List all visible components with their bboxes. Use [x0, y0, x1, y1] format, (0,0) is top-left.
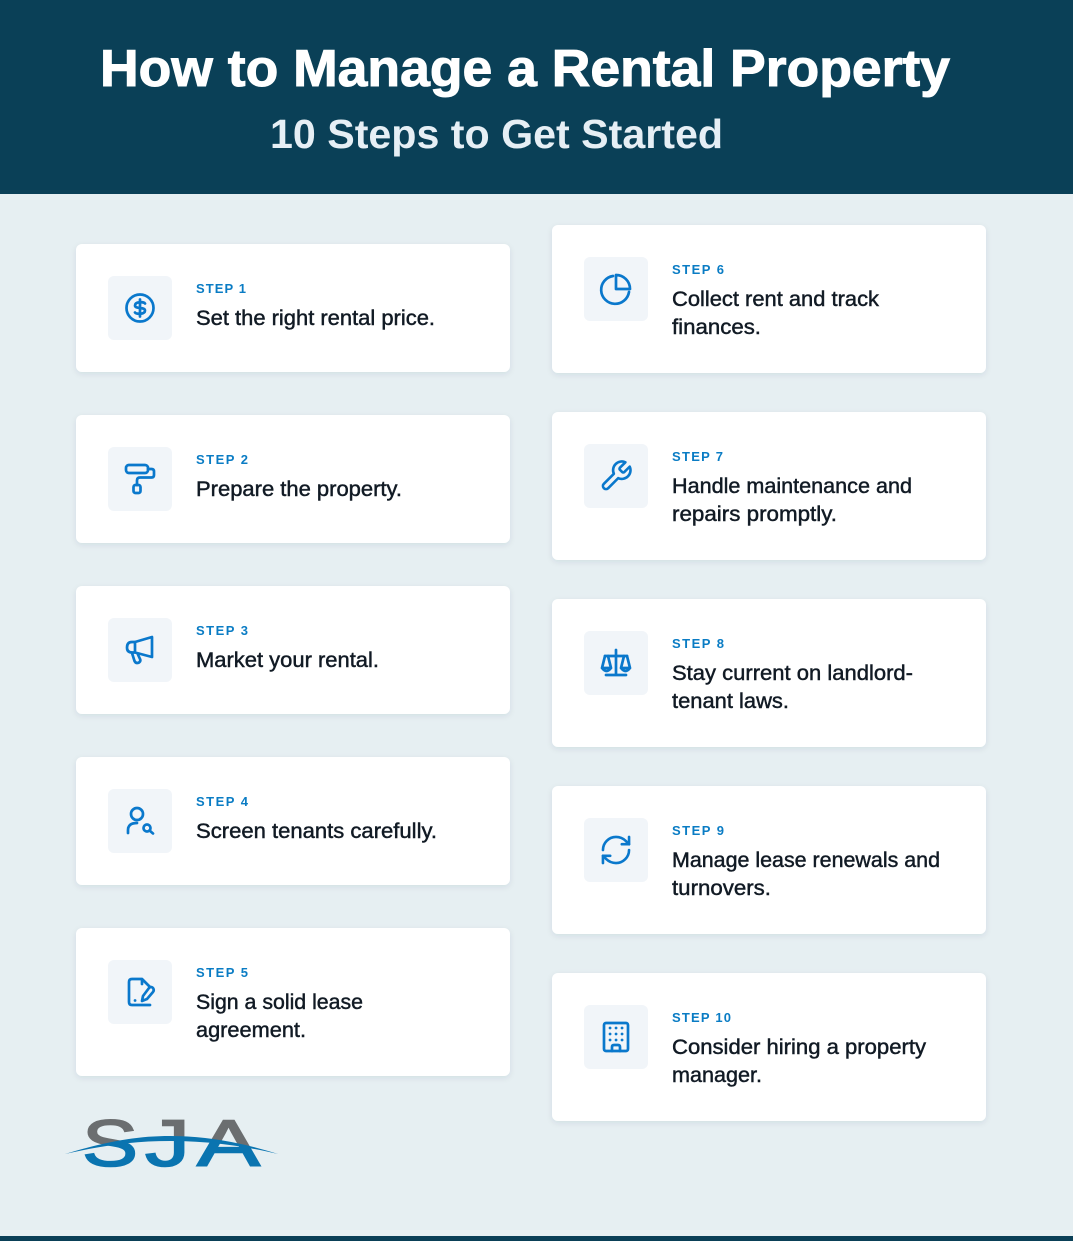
logo: SJA: A [197, 1106, 260, 1180]
step label: STEP 10 [672, 1010, 731, 1025]
step text: repairs promptly. [672, 503, 837, 526]
step text [672, 1036, 927, 1087]
panel: step 1 [76, 244, 510, 372]
step text [672, 849, 940, 900]
step text: Market your rental. [196, 649, 379, 672]
panel: step 4 [76, 757, 510, 885]
step text: tenant laws. [672, 690, 789, 713]
step text: Handle maintenance and [672, 475, 912, 498]
step text [672, 288, 880, 339]
logo: SJA: S [82, 1106, 138, 1180]
icon: dollar [126, 294, 154, 322]
step label: STEP 6 [672, 262, 724, 277]
step label: STEP 7 [672, 449, 723, 464]
logo: SJA: J [145, 1106, 190, 1180]
panel: step 6 [552, 225, 986, 373]
step label: STEP 2 [196, 452, 248, 467]
step text: Manage lease renewals and [672, 849, 940, 872]
panel: step 10 [552, 973, 986, 1121]
panel: step 2 [76, 415, 510, 543]
step text [196, 991, 363, 1042]
step text: manager. [672, 1064, 762, 1087]
subtitle: 10 Steps to Get Started [270, 111, 723, 157]
icon: person search [128, 808, 153, 834]
icon: refresh [603, 837, 629, 863]
step text: Consider hiring a property [672, 1036, 927, 1059]
step label: STEP 8 [672, 636, 724, 651]
panel: step 3 [76, 586, 510, 714]
step text: Prepare the property. [196, 478, 402, 501]
step label: STEP 3 [196, 623, 248, 638]
icon: megaphone [127, 637, 152, 663]
icon: building [604, 1023, 628, 1051]
step text: agreement. [196, 1019, 306, 1042]
icon: wrench [603, 461, 631, 489]
step text: Stay current on landlord- [672, 662, 913, 685]
step text: Set the right rental price. [196, 307, 435, 330]
step text: Collect rent and track [672, 288, 880, 311]
step text [672, 662, 913, 713]
step text: Screen tenants carefully. [196, 820, 437, 843]
step label: STEP 4 [196, 794, 249, 809]
step text: finances. [672, 316, 761, 339]
logo: SJA [65, 1119, 278, 1168]
icon: scales [602, 650, 630, 675]
icon: paint roller [126, 465, 154, 493]
icon: document pen [129, 979, 154, 1005]
step text: turnovers. [672, 877, 771, 900]
step text: Sign a solid lease [196, 991, 363, 1014]
step text [672, 475, 912, 526]
logo: SJA: J [145, 1106, 190, 1180]
logo: SJA: A [197, 1106, 260, 1180]
panel: step 9 [552, 786, 986, 934]
footer strip [0, 1236, 1073, 1241]
panel: step 8 [552, 599, 986, 747]
title: How to Manage a Rental Property [100, 40, 950, 98]
step label: STEP 1 [196, 281, 246, 296]
icon: pie chart [601, 275, 630, 304]
header band [0, 0, 1073, 194]
panel: step 7 [552, 412, 986, 560]
panel: step 5 [76, 928, 510, 1076]
step label: STEP 9 [672, 823, 724, 838]
step label: STEP 5 [196, 965, 248, 980]
logo: SJA: S [82, 1106, 138, 1180]
